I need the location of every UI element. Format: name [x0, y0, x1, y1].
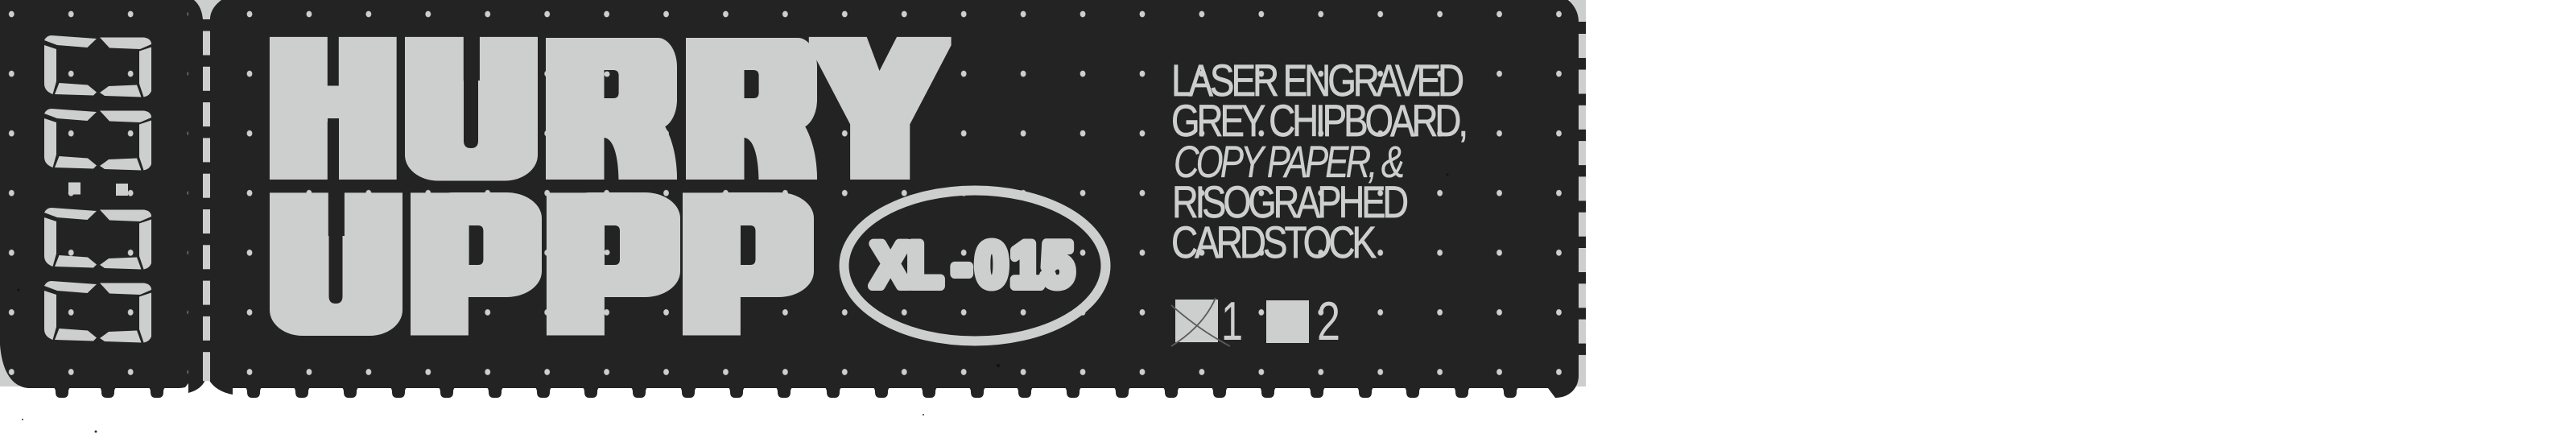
letter U: U: [412, 0, 531, 217]
seven-segment timer 00:00 on stub: [44, 35, 151, 343]
option 2 checkbox: [1266, 291, 1340, 352]
letter Y: Y: [824, 0, 936, 217]
ticket infographic: [0, 0, 1586, 433]
description line 1: LASER ENGRAVED: [1171, 55, 1463, 105]
timer digit 1: [44, 35, 151, 97]
dark card body with stub and main panel: [0, 0, 1579, 398]
timer digit 2: [44, 109, 151, 171]
letter H: H: [277, 0, 390, 217]
dot grid on stub: [0, 0, 188, 386]
badge oval ring: [844, 190, 1106, 341]
description line 3 italic: COPY PAPER, &: [1174, 136, 1403, 187]
letter U: [405, 37, 538, 180]
letter R: R: [690, 0, 806, 217]
letter U: [270, 192, 402, 336]
letter R: [546, 38, 677, 180]
letter R: R: [550, 0, 666, 217]
hand-drawn X mark: [1171, 298, 1230, 346]
perforated bottom edge teeth: [52, 387, 1520, 398]
letter U: U: [277, 155, 396, 373]
option number 2: 2: [1317, 291, 1340, 352]
dashed tear line between stub and main panel: [203, 31, 210, 381]
badge: XL-015 oval: [844, 190, 1106, 341]
dashed right edge perforation: [1579, 22, 1586, 355]
letter P: P: [551, 155, 670, 374]
description line 5: CARDSTOCK: [1171, 217, 1377, 267]
letter P: [683, 192, 814, 335]
description line 4: RISOGRAPHED: [1172, 176, 1407, 227]
option 1 checkbox marked with hand-drawn X: [1171, 291, 1243, 352]
letter P: [411, 192, 542, 335]
description line 2: GREY CHIPBOARD,: [1171, 95, 1465, 146]
checkbox 2 square: [1266, 300, 1309, 343]
grey board showing behind the card: [0, 0, 1586, 386]
timer digit 4: [44, 281, 151, 343]
dot grid on main panel: [233, 0, 1574, 386]
timer colon: [68, 182, 128, 196]
option number 1: 1: [1221, 291, 1243, 352]
letter P: P: [415, 155, 534, 374]
badge label: XL-015: [872, 231, 1073, 300]
letter R: [686, 38, 817, 180]
letter P: P: [687, 155, 806, 374]
top cusp of tear line: [194, 0, 221, 19]
heading: HURRY: [269, 37, 952, 180]
timer digit 3: [44, 208, 151, 269]
heading: UPPP: [270, 192, 814, 336]
description text block: [1171, 55, 1465, 267]
letter P: [546, 192, 680, 335]
stray print specks: [18, 174, 1449, 433]
checkbox 1 square: [1175, 300, 1218, 342]
